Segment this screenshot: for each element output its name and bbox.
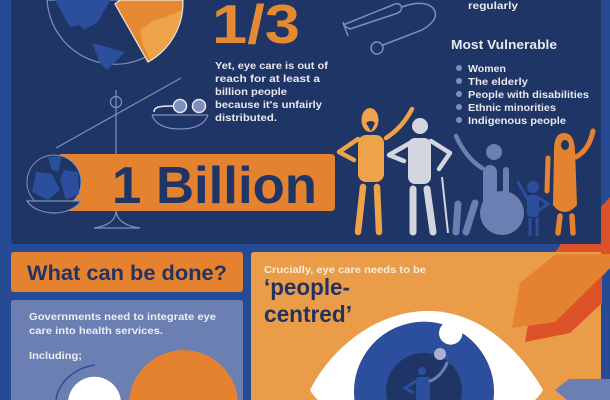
icon: large globe with orange wedge (47, 0, 183, 70)
figure: elderly person with cane (389, 118, 450, 233)
icon: balance scale (56, 78, 208, 228)
figure: woman in robe (547, 131, 593, 233)
list: vulnerable groups: The elderly (468, 76, 528, 88)
text: eye care out of reach (215, 60, 329, 124)
text: eye care out of reach: Yet, eye care is out of (215, 60, 329, 72)
text: governments need to integrate: care into health services. (29, 325, 163, 337)
ribbon: orange (512, 254, 610, 328)
figure: child (518, 181, 548, 236)
icon: small globe on scale (27, 155, 81, 213)
ribbon: blue (555, 379, 610, 400)
text: crucially: Crucially, eye care needs to be (264, 265, 426, 276)
icon: stethoscope (343, 3, 435, 54)
panel: what can be done header: What can be done? (27, 261, 227, 285)
panel: what can be done header (11, 252, 243, 292)
panel: people-centred (251, 252, 601, 400)
ribbon: red (525, 268, 610, 342)
list: vulnerable groups: Ethnic minorities (468, 102, 556, 114)
list: vulnerable groups (456, 63, 589, 127)
icon: glasses (154, 100, 206, 112)
banner: 1 Billion: 1 Billion (112, 157, 317, 215)
text: eye care out of reach: billion people (215, 86, 287, 98)
list: vulnerable groups: Indigenous people (468, 115, 566, 127)
text: regularly: regularly (468, 0, 518, 12)
figure: man with turban (339, 108, 412, 232)
banner: 1 Billion (60, 154, 335, 215)
ribbon: red top corner (554, 197, 610, 254)
list: vulnerable groups: People with disabilities (468, 89, 589, 101)
icon: eye (310, 311, 543, 400)
text: governments need to integrate: Including; (29, 350, 82, 362)
panel: navy top panel (11, 0, 601, 244)
figure: person in wheelchair (456, 136, 524, 235)
icon: orange circle (129, 350, 238, 400)
panel: governments (11, 300, 243, 400)
heading: people-centred: ‘people- (264, 274, 350, 300)
heading: people-centred (264, 274, 352, 327)
heading: Most Vulnerable: Most Vulnerable (451, 38, 557, 52)
heading: people-centred: centred’ (264, 301, 352, 327)
list: vulnerable groups: Women (468, 63, 506, 75)
text: eye care out of reach: because it's unfairly (215, 99, 322, 111)
text: eye care out of reach: distributed. (215, 112, 277, 124)
text: governments need to integrate (29, 311, 216, 362)
text: eye care out of reach: reach for at least a (215, 73, 320, 85)
text: governments need to integrate: Governments need to integrate eye (29, 311, 216, 323)
icon: white circle with arc (56, 365, 121, 400)
